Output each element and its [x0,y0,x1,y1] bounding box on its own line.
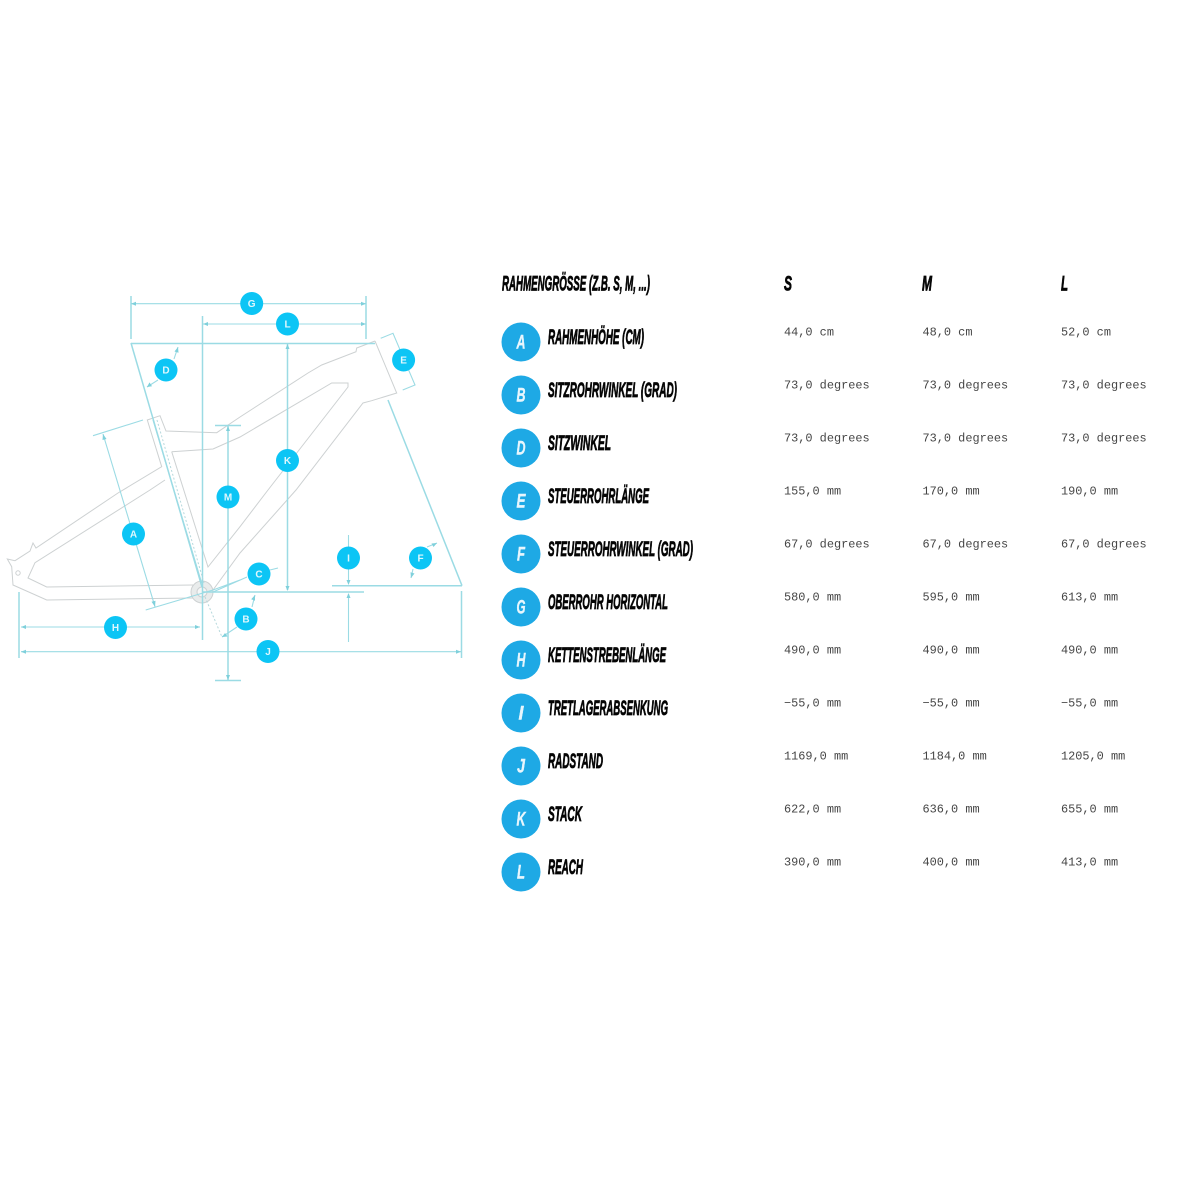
row J [502,746,1125,786]
marker E: E [400,356,407,366]
marker E [392,348,415,372]
table header: S [784,272,792,296]
row G: OBERROHR HORIZONTAL [548,591,668,614]
row E: 170,0 mm [922,484,980,498]
row D: 73,0 degrees [784,432,870,446]
row E: E [516,492,526,512]
row L: 390,0 mm [784,856,841,870]
row A: RAHMENHÖHE (CM) [548,326,644,349]
row B: 73,0 degrees [922,378,1008,392]
dimension arrowheads [21,302,461,680]
row I: −55,0 mm [1061,696,1118,710]
row B: 73,0 degrees [1061,378,1147,392]
row B: 73,0 degrees [784,378,870,392]
row J: J [517,756,525,778]
row J: RADSTAND [548,750,603,773]
row F: F [517,544,526,566]
row L [502,852,1118,892]
row E: 190,0 mm [1061,484,1118,498]
row B: B [516,386,526,406]
row A: 52,0 cm [1061,326,1111,340]
row K: 636,0 mm [922,802,980,816]
bottom bracket [191,581,213,603]
row L: REACH [548,856,583,879]
marker G: G [248,299,256,310]
row J: 1184,0 mm [922,750,987,764]
marker K: K [284,456,292,467]
row E: STEUERROHRLÄNGE [548,485,649,508]
row D: D [516,438,526,460]
row J: 1169,0 mm [784,750,848,764]
row D: 73,0 degrees [1061,432,1147,446]
row F: STEUERROHRWINKEL (GRAD) [548,538,693,561]
marker M [216,486,240,508]
row H: 490,0 mm [784,644,841,658]
row L: L [517,862,525,884]
marker I (bottom bracket drop): I [347,554,350,564]
row I: TRETLAGERABSENKUNG [548,697,668,720]
row B: SITZROHRWINKEL (GRAD) [548,379,677,402]
row A [502,322,1111,362]
row J: 1205,0 mm [1061,750,1125,764]
row F: 67,0 degrees [1061,538,1147,552]
row K: STACK [548,803,583,826]
row I [502,694,1118,732]
dimension lines [19,296,462,680]
marker J [256,640,280,663]
row B [502,376,1147,414]
marker I (bottom bracket drop) [337,546,360,570]
table header: M [922,272,932,296]
table header [502,272,1068,296]
table header: L [1061,272,1068,296]
marker J: J [265,647,271,658]
row I: −55,0 mm [922,696,980,710]
row H: 490,0 mm [922,644,980,658]
row H: KETTENSTREBENLÄNGE [548,644,666,667]
row A: 48,0 cm [922,326,972,340]
row G: G [516,598,526,618]
row G: 613,0 mm [1061,590,1118,604]
row A: A [516,332,526,354]
row D: 73,0 degrees [922,432,1008,446]
marker H: H [112,623,119,634]
row G: 595,0 mm [922,590,980,604]
marker F: F [417,554,424,564]
marker D [154,358,178,382]
marker A [122,522,145,546]
row I: −55,0 mm [784,696,841,710]
row G: 580,0 mm [784,590,841,604]
marker L: L [284,320,291,330]
row F: 67,0 degrees [784,538,870,552]
bike frame geometry diagram [7,292,462,680]
row I: I [518,704,524,724]
row A: 44,0 cm [784,326,834,340]
row D: SITZWINKEL [548,432,611,455]
row K: 655,0 mm [1061,802,1118,816]
row F: 67,0 degrees [922,538,1008,552]
marker M: M [224,492,232,504]
row L: 400,0 mm [922,856,980,870]
row H: H [516,650,526,672]
table header: RAHMENGRÖSSE (Z.B. S, M, ...) [502,272,650,296]
row D [502,428,1147,468]
marker D: D [162,366,170,376]
row E [502,482,1118,520]
row K [502,800,1118,838]
marker H [104,616,127,639]
row G [502,588,1118,626]
row F [502,534,1147,574]
row K: K [516,810,526,830]
marker B [234,608,258,630]
row K: 622,0 mm [784,802,841,816]
row E: 155,0 mm [784,484,841,498]
marker L [276,312,299,336]
marker A: A [130,530,137,540]
bike frame outline [7,341,397,600]
marker B: B [242,614,250,626]
geometry table [502,272,1147,892]
row H [502,640,1118,680]
marker C [248,562,270,586]
row L: 413,0 mm [1061,856,1118,870]
row H: 490,0 mm [1061,644,1118,658]
marker C: C [255,570,263,580]
marker G [240,292,263,315]
marker F [409,546,432,570]
marker K [276,449,299,472]
